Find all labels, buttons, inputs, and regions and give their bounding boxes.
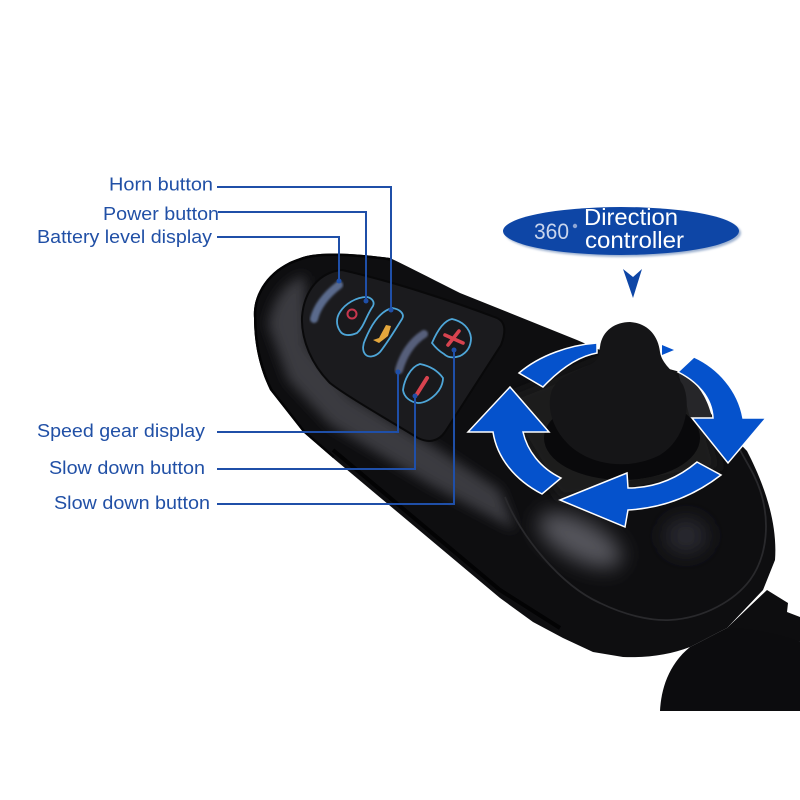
labels <box>37 174 219 513</box>
arrow: top tip <box>662 345 674 355</box>
label: horn button: Horn button <box>109 174 213 194</box>
line: slow down <box>217 396 415 469</box>
speed up button <box>432 319 471 357</box>
degree mark <box>573 224 577 228</box>
label: slow down button: Slow down button <box>49 458 205 478</box>
direction arrows <box>468 343 766 527</box>
line: battery <box>217 237 339 281</box>
leader lines <box>217 187 454 504</box>
button panel <box>302 270 504 441</box>
badge: direction controller <box>503 204 741 257</box>
label: slow down button 2: Slow down button <box>54 493 210 513</box>
arrow: pointing to joystick <box>623 269 642 298</box>
arrow: right arc <box>678 357 766 463</box>
label: speed gear display: Speed gear display <box>37 421 205 441</box>
arrow: left arc <box>468 387 561 494</box>
line: slow down second <box>217 350 454 504</box>
battery level bar <box>314 285 339 319</box>
controller body <box>254 254 775 657</box>
arrow: top arc <box>519 343 597 387</box>
360 degrees: 360 <box>534 219 569 244</box>
controller text: controller <box>585 227 684 253</box>
joystick <box>544 322 712 480</box>
label: power button: Power button <box>103 204 219 224</box>
icon: rear ball and cable <box>660 590 800 711</box>
speed gear bar <box>399 334 424 370</box>
power button <box>337 297 374 335</box>
line: power <box>218 212 366 301</box>
leader dots <box>336 278 456 398</box>
horn button <box>363 308 403 356</box>
speed down button <box>403 364 443 403</box>
line: horn <box>217 187 391 310</box>
label: battery level display: Battery level display <box>37 227 212 247</box>
line: speed gear <box>217 372 398 432</box>
direction text: Direction <box>584 204 678 230</box>
arrow: bottom arc <box>560 462 721 527</box>
